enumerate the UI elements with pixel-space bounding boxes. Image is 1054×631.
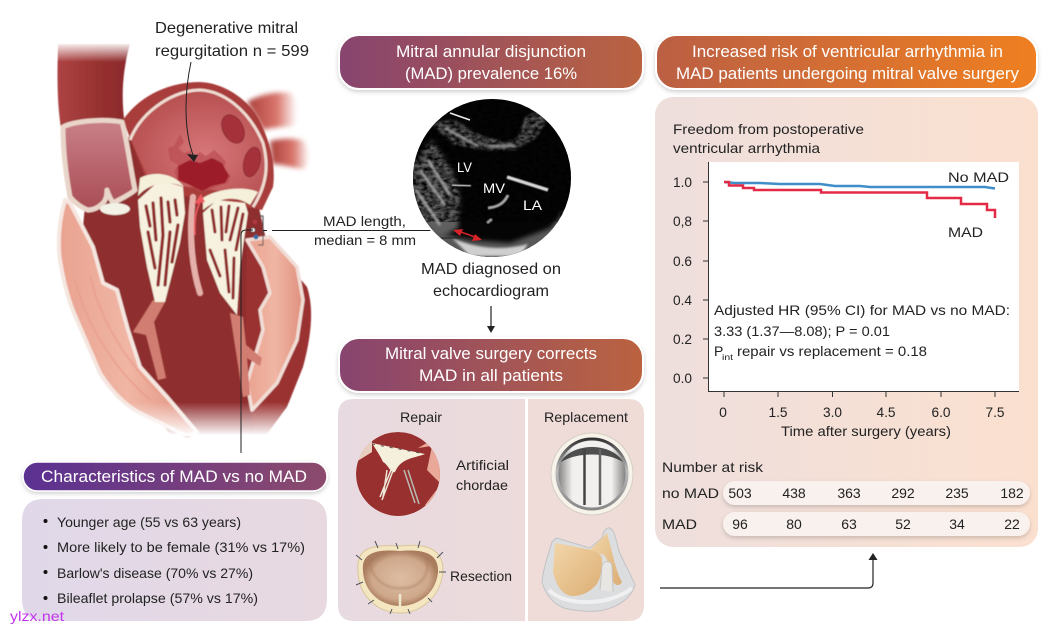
left ventricular wall: free wall: [245, 233, 311, 434]
curve: MAD: [724, 182, 995, 218]
echo labels: MV: [483, 180, 506, 196]
label: degenerative mitral regurgitation: [155, 20, 309, 60]
arrow: surgery to outcome: [660, 553, 878, 588]
label: resection: Resection: [450, 568, 512, 584]
row: no MAD: 235: [945, 485, 969, 501]
heading: MAD prevalence: Mitral annular disjunction: [396, 43, 586, 61]
heading: MAD prevalence: [339, 35, 643, 89]
heading: surgery corrects MAD: [339, 338, 643, 392]
icon: bioprosthetic valve: [542, 528, 635, 611]
row: no MAD: 182: [1000, 485, 1024, 501]
chart title: [673, 121, 864, 156]
row: no MAD: 438: [782, 485, 806, 501]
row: MAD: 96: [732, 516, 748, 532]
x axis labels: 7.5: [986, 404, 1005, 420]
echo labels: LA: [523, 197, 543, 213]
y axis labels: 0.4: [673, 292, 692, 308]
pulmonary veins: [247, 92, 309, 169]
axes: [703, 162, 1019, 397]
label: artificial chordae: [456, 457, 509, 493]
illustration: heart cross-section: [40, 42, 330, 436]
y axis labels: 0.2: [673, 331, 692, 347]
x axis labels: [719, 404, 1005, 420]
row: MAD: 22: [1004, 516, 1020, 532]
list item: younger age: Younger age (55 vs 63 years): [57, 514, 241, 530]
row: MAD: [662, 512, 1030, 536]
y axis labels: 0.6: [673, 253, 692, 269]
curve: no MAD: [724, 182, 995, 188]
label: degenerative mitral regurgitation: Degenerative mitral: [155, 20, 298, 37]
label: MAD length: median = 8 mm: [314, 232, 416, 248]
icon: artificial chordae: [356, 432, 445, 516]
y axis labels: [673, 174, 692, 386]
label: MAD diagnosed on echocardiogram: echocardiogram: [433, 283, 549, 300]
statistics: Adjusted HR (95% CI) for MAD vs no MAD:: [714, 302, 1010, 318]
heading: ventricular arrhythmia risk: MAD patients undergoing mitral valve surgery: [676, 65, 1020, 83]
pulmonary vein openings: [217, 111, 263, 178]
panel: repair: [338, 399, 525, 621]
left ventricular inflow arrow: [191, 194, 205, 293]
y axis labels: 1.0: [673, 174, 692, 190]
Kaplan-Meier chart: [673, 162, 1019, 439]
label: MAD diagnosed on echocardiogram: MAD diagnosed on: [421, 261, 561, 278]
heading: characteristics of MAD: Characteristics of MAD vs no MAD: [41, 468, 307, 486]
list item: female: More likely to be female (31% vs 17%): [57, 539, 305, 555]
aorta: [50, 42, 140, 135]
label: artificial chordae: Artificial: [456, 457, 509, 473]
statistics: P: [714, 343, 723, 359]
list item: Barlow's disease: Barlow's disease (70% vs 27%): [57, 565, 253, 581]
arrow: echo to surgery: [487, 306, 495, 333]
statistics: 3.33 (1.37—8.08); P = 0.01: [714, 323, 890, 339]
icon: mechanical valve: [551, 433, 633, 515]
chart title: ventricular arrhythmia: [673, 140, 820, 156]
leader line to echocardiogram: [263, 230, 448, 232]
row: MAD: 52: [895, 516, 911, 532]
label: degenerative mitral regurgitation: regurgitation n = 599: [155, 43, 309, 60]
x axis labels: 1.5: [768, 404, 788, 420]
y axis labels: 0.0: [673, 370, 692, 386]
number at risk table: Number at risk: [662, 459, 764, 475]
label: MAD: MAD: [948, 224, 983, 240]
icon: resection ring: [356, 541, 446, 614]
label: MAD diagnosed on echocardiogram: [421, 261, 561, 300]
label: MAD length: MAD length,: [323, 213, 406, 229]
arrow: regurgitation pointer: [186, 62, 198, 162]
list item: bileaflet prolapse: Bileaflet prolapse (57% vs 17%): [57, 590, 258, 606]
left atrium: [123, 82, 274, 210]
papillary muscles: [133, 300, 262, 397]
row: no MAD: 292: [891, 485, 915, 501]
panel: characteristics list: [22, 499, 327, 621]
heading: ventricular arrhythmia risk: Increased risk of ventricular arrhythmia in: [692, 43, 1003, 61]
x axis labels: 0: [719, 404, 727, 420]
number at risk table: [662, 459, 1030, 536]
regurgitant jet: [168, 134, 231, 192]
x axis labels: 6.0: [932, 404, 951, 420]
x axis title: Time after surgery (years): [781, 423, 951, 439]
x axis labels: 4.5: [876, 404, 896, 420]
row: MAD: 80: [786, 516, 802, 532]
mitral valve leaflet: anterior: [138, 180, 185, 302]
statistics: int: [722, 353, 734, 362]
mitral annulus: [138, 174, 258, 210]
label: MAD length: [314, 213, 416, 248]
echo labels: [457, 159, 543, 213]
left ventricle cavity: [80, 135, 305, 434]
heading: characteristics of MAD: [23, 462, 327, 491]
echocardiogram image: [410, 96, 574, 262]
row: MAD: 34: [949, 516, 965, 532]
panel: replacement: [528, 399, 644, 621]
replacement heading: Replacement: [544, 409, 628, 425]
row: no MAD: 503: [728, 485, 752, 501]
fade at base of heart: [40, 402, 330, 436]
mitral valve leaflet: posterior: [203, 200, 248, 315]
chart title: Freedom from postoperative: [673, 121, 864, 137]
row: MAD: MAD: [662, 516, 697, 532]
MAD location marker: [251, 216, 263, 245]
heading: MAD prevalence: (MAD) prevalence 16%: [405, 65, 577, 83]
panel: arrhythmia outcome: [655, 97, 1038, 547]
echo labels: LV: [457, 159, 473, 175]
statistics: [714, 302, 1010, 362]
aortic root: [63, 120, 135, 215]
row: MAD: 63: [841, 516, 857, 532]
y axis labels: 0,8: [673, 213, 692, 229]
label: no MAD: No MAD: [948, 169, 1009, 185]
heading: ventricular arrhythmia risk: [656, 35, 1037, 89]
MAD length double arrow: [453, 229, 482, 241]
statistics: repair vs replacement = 0.18: [737, 343, 927, 359]
left ventricular wall: septum: [59, 200, 197, 436]
heading: surgery corrects MAD: Mitral valve surgery corrects: [385, 345, 597, 363]
watermark: ylzx.net: [10, 608, 64, 624]
heading: surgery corrects MAD: MAD in all patients: [419, 367, 563, 385]
x axis labels: 3.0: [823, 404, 842, 420]
row: no MAD: 363: [837, 485, 861, 501]
row: no MAD: [662, 481, 1030, 505]
label: artificial chordae: chordae: [456, 477, 508, 493]
row: no MAD: no MAD: [662, 485, 719, 501]
repair heading: Repair: [400, 409, 442, 425]
leader line from MAD marker to characteristics: [241, 230, 253, 453]
